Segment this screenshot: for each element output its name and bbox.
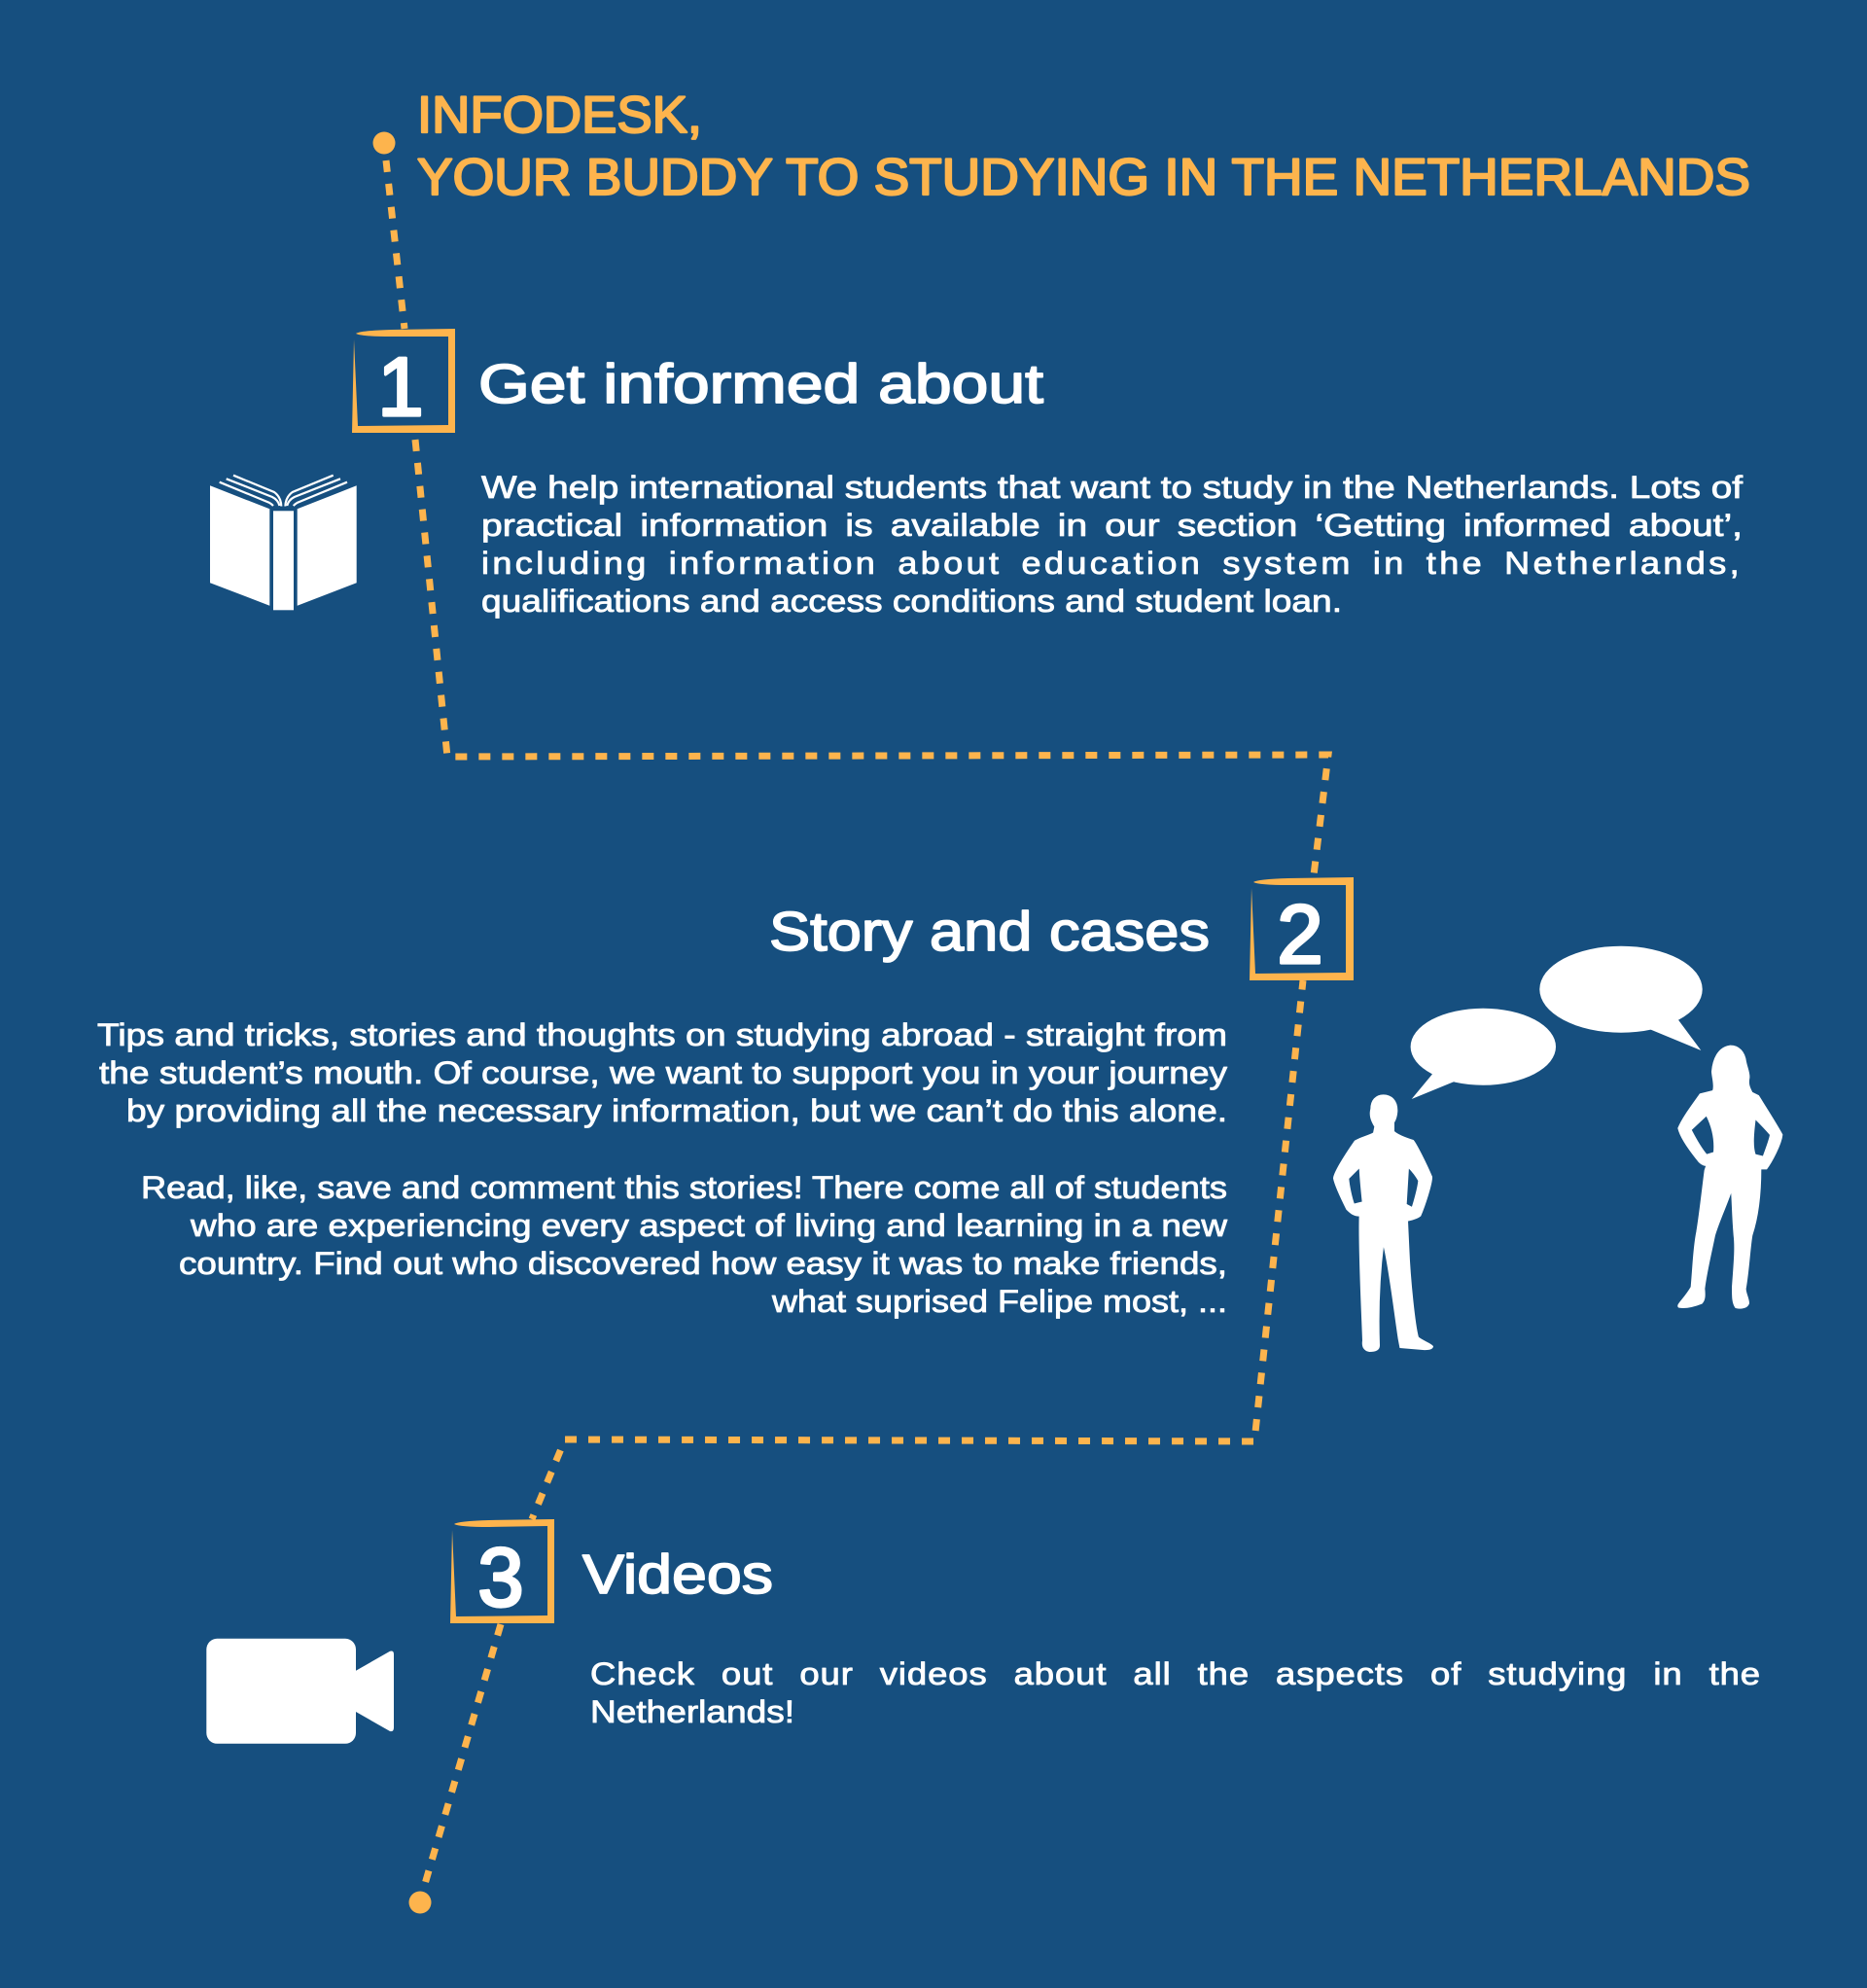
panel: videos (206, 1519, 1761, 1744)
text block: story and cases description: what suprised Felipe most, ... (771, 1284, 1227, 1319)
text block: get informed description: We help international students that want to study in the Netherlands. Lots of (481, 470, 1743, 505)
title (417, 87, 1750, 206)
number badge 3 (450, 1519, 554, 1624)
start dot (373, 132, 395, 154)
text block: videos description: Netherlands! (590, 1694, 794, 1729)
heading: get informed about: Get informed about (478, 353, 1043, 414)
text block: story and cases description: Tips and tricks, stories and thoughts on studying abroad - straight from (97, 1017, 1227, 1052)
heading: story and cases: Story and cases (769, 901, 1210, 962)
text block: story and cases description: country. Find out who discovered how easy it was to make friends, (179, 1246, 1227, 1281)
number badge 1 (352, 329, 455, 434)
connector: step 3 to end (425, 1624, 501, 1884)
panel: story and cases (97, 877, 1782, 1351)
icon: video camera (206, 1639, 394, 1744)
speech bubble: right (1539, 946, 1703, 1050)
dashed route connecting the steps (373, 132, 1328, 1914)
connector: start to step 1 (386, 160, 405, 329)
text block: get informed description (481, 470, 1743, 619)
text block: get informed description: including information about education system in the Netherlands, (481, 546, 1743, 581)
text block: story and cases description (97, 1017, 1228, 1319)
text block: story and cases description: Read, like, save and comment this stories! There come all of students (141, 1170, 1227, 1205)
end dot (408, 1891, 432, 1914)
number badge 2: 2 (1277, 889, 1323, 981)
icon: open book (210, 476, 357, 610)
number badge 1: 1 (377, 341, 424, 434)
silhouette: man (1334, 1095, 1432, 1351)
text block: videos description (590, 1656, 1761, 1729)
heading: videos: Videos (582, 1544, 773, 1605)
text block: get informed description: practical information is available in our section ‘Getting informed about’, (481, 508, 1743, 543)
title: YOUR BUDDY TO STUDYING IN THE NETHERLANDS (417, 149, 1750, 206)
speech bubble: left (1411, 1009, 1556, 1099)
text block: get informed description: qualifications and access conditions and student loan. (481, 584, 1342, 619)
icon: two students talking (1334, 946, 1782, 1351)
connector: step 1 to step 2 (415, 440, 1328, 875)
connector: step 2 to step 3 (532, 980, 1303, 1519)
number badge 2 (1250, 877, 1354, 981)
text block: story and cases description: the student’s mouth. Of course, we want to support you in your journey (99, 1055, 1227, 1090)
text block: story and cases description: who are experiencing every aspect of living and learning in a new (190, 1208, 1228, 1243)
silhouette: woman (1678, 1046, 1782, 1308)
title: INFODESK, (417, 87, 702, 144)
number badge 3: 3 (477, 1532, 524, 1624)
text block: videos description: Check out our videos about all the aspects of studying in the (590, 1656, 1761, 1691)
panel: get informed about (210, 329, 1743, 619)
text block: story and cases description: by providing all the necessary information, but we can’t do this alone. (126, 1093, 1227, 1128)
